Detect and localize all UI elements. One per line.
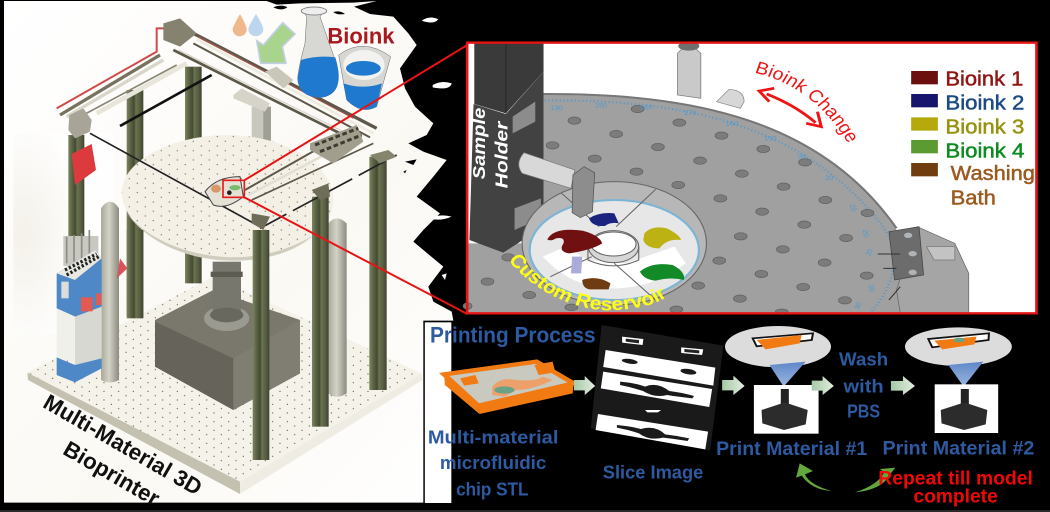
protractor numbers: 160 [640,104,652,111]
label: Sample Holder [470,108,512,188]
gantry motors and carriages [68,18,397,230]
heading: Printing Process: Printing Process [430,323,596,348]
label: Wash with PBS: PBS [847,401,880,422]
panel: 3D bioprinter render [4,1,467,511]
white left strip [425,322,451,503]
label: Multi-Material 3D Bioprinter: Multi-Material 3D [39,389,206,500]
label: Custom Reservoir: Custom Reservoir [511,254,664,310]
grey cylindrical post right [328,218,347,397]
arrow [574,376,595,395]
panel: zoomed reservoir view [462,41,1038,315]
panel: printing process [425,322,1034,507]
print stage with mini reservoir [205,177,243,206]
print station 1 [725,326,831,434]
back columns [127,67,387,390]
arrow [812,376,834,395]
protractor numbers: 130 [550,104,563,112]
protractor numbers: 20 [825,174,833,182]
label: chip STL: chip STL [456,479,528,500]
legend: Washing [951,162,1035,185]
red source box [223,180,244,197]
legend: Bioink 1 [945,68,1023,90]
swatch: washing bath [911,163,938,176]
label: Slice Image: Slice Image [603,462,703,483]
bottom strip [0,510,1050,512]
protractor numbers: 150 [595,102,607,109]
label: Sample Holder: Holder [493,120,512,188]
green repeat arrows [796,463,895,492]
arrow into printer [257,23,295,63]
rotating table top [468,95,969,313]
protractor numbers: 20 [847,203,858,213]
white background blob [4,1,453,503]
electronics box [57,230,127,382]
well: bioink 2 [589,213,619,226]
protractor numbers: 170 [684,109,696,117]
rotating circular table [122,135,333,261]
label: Wash with PBS: with [843,376,884,397]
front columns [68,135,329,460]
label: chip STL: Multi-material [428,427,558,448]
well: washing bath [582,278,611,289]
legend: Bath [951,187,996,209]
zoom callout lines [244,45,467,314]
probe arm [519,153,595,218]
table holes [463,105,874,314]
red frame [467,43,1036,313]
custom reservoir [522,182,706,305]
icon: flask [298,7,339,98]
protractor numbers [550,102,876,311]
swatch: bioink 2 [911,94,938,107]
swatch: bioink 3 [911,117,938,131]
rotary pedestal block [155,262,300,410]
protractor numbers: 160 [726,120,738,127]
back posts [677,41,744,108]
protractor numbers: 30 [798,153,806,160]
icon: orange microfluidic chip [444,362,573,414]
protractor numbers: 30 [853,301,864,311]
red control board [72,144,96,185]
legend [911,68,1035,209]
well: bioink 1 [547,230,602,253]
protractor numbers: 150 [764,135,777,143]
label: Print Material #1: Print Material #1 [716,439,867,460]
sample holder column [469,43,544,253]
arrow [891,376,915,395]
legend: Bioink 2 [945,92,1024,114]
gantry upright [252,107,271,167]
legend: Bioink 3 [945,116,1024,138]
label: Repeat till model complete: complete [913,485,998,507]
label: Multi-Material 3D Bioprinter: Bioprinter [59,436,164,511]
swatch: bioink 1 [911,71,938,84]
label: chip STL: microfluidic [440,453,546,474]
optical base plate [27,277,423,494]
well: bioink 4 [640,264,684,281]
protractor numbers: 30 [866,284,876,293]
label: Sample Holder: Sample [470,108,489,179]
protractor numbers: 20 [861,229,870,238]
label: chip STL [428,427,558,500]
gantry frame [57,28,397,228]
slice image stack [591,325,723,451]
well: bioink 3 [643,227,681,248]
label: Wash with PBS [839,349,888,422]
legend: Bioink 4 [945,140,1025,162]
arrow: bioink change [759,88,821,127]
label: Wash with PBS: Wash [839,349,888,370]
front grey post [101,202,119,382]
protractor numbers: 20 [864,248,875,257]
label: Bioink Change: Bioink Change [756,62,856,142]
icon: droplets [233,14,263,36]
label: Repeat till model complete [878,467,1033,507]
label: Bioink: Bioink [327,23,395,48]
print station 2 [905,327,1012,433]
right clamp [878,227,969,313]
swatch: bioink 4 [911,140,938,153]
arrow [722,376,745,395]
icon: beaker [339,46,391,110]
